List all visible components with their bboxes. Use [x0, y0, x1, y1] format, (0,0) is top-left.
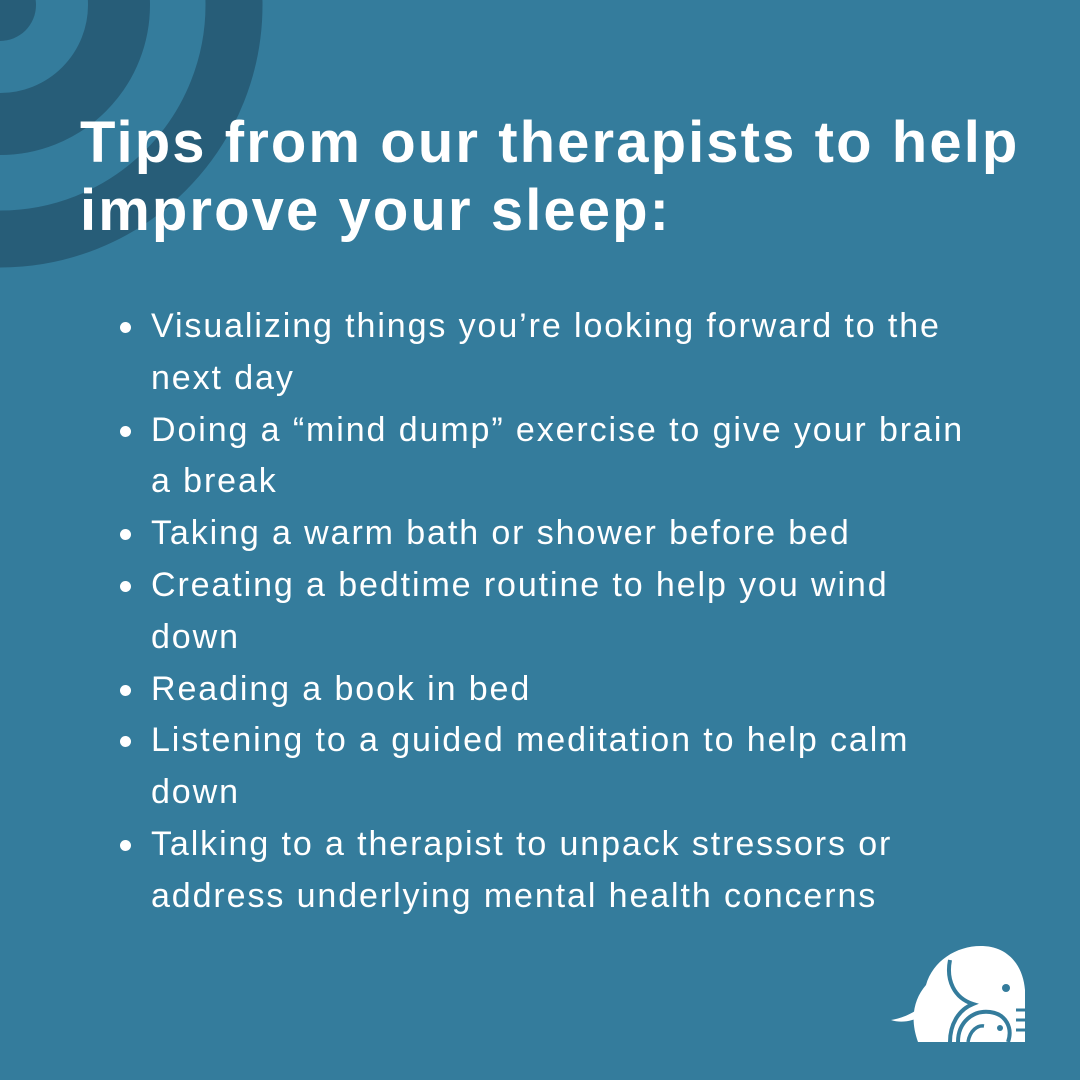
- title: [80, 110, 1019, 243]
- title: Tips from our therapists to help: [80, 110, 1019, 175]
- tips list: [120, 307, 964, 915]
- icon: elephant logo: [891, 946, 1025, 1042]
- tips list: Talking to a therapist to unpack stressors or: [151, 825, 892, 863]
- tips list: down: [151, 773, 240, 811]
- tips list: Visualizing things you’re looking forward to the: [151, 307, 941, 345]
- title: improve your sleep:: [80, 178, 671, 243]
- tips list: down: [151, 618, 240, 656]
- decorative arcs top-left: [0, 0, 262, 268]
- tips list: Taking a warm bath or shower before bed: [151, 514, 851, 552]
- tips list: Reading a book in bed: [151, 670, 531, 708]
- tips list: a break: [151, 462, 278, 500]
- tips list: Doing a “mind dump” exercise to give your brain: [151, 411, 964, 449]
- tips list: next day: [151, 359, 295, 397]
- tips list: Creating a bedtime routine to help you wind: [151, 566, 889, 604]
- tips list: address underlying mental health concerns: [151, 877, 877, 915]
- tips list: Listening to a guided meditation to help calm: [151, 721, 909, 759]
